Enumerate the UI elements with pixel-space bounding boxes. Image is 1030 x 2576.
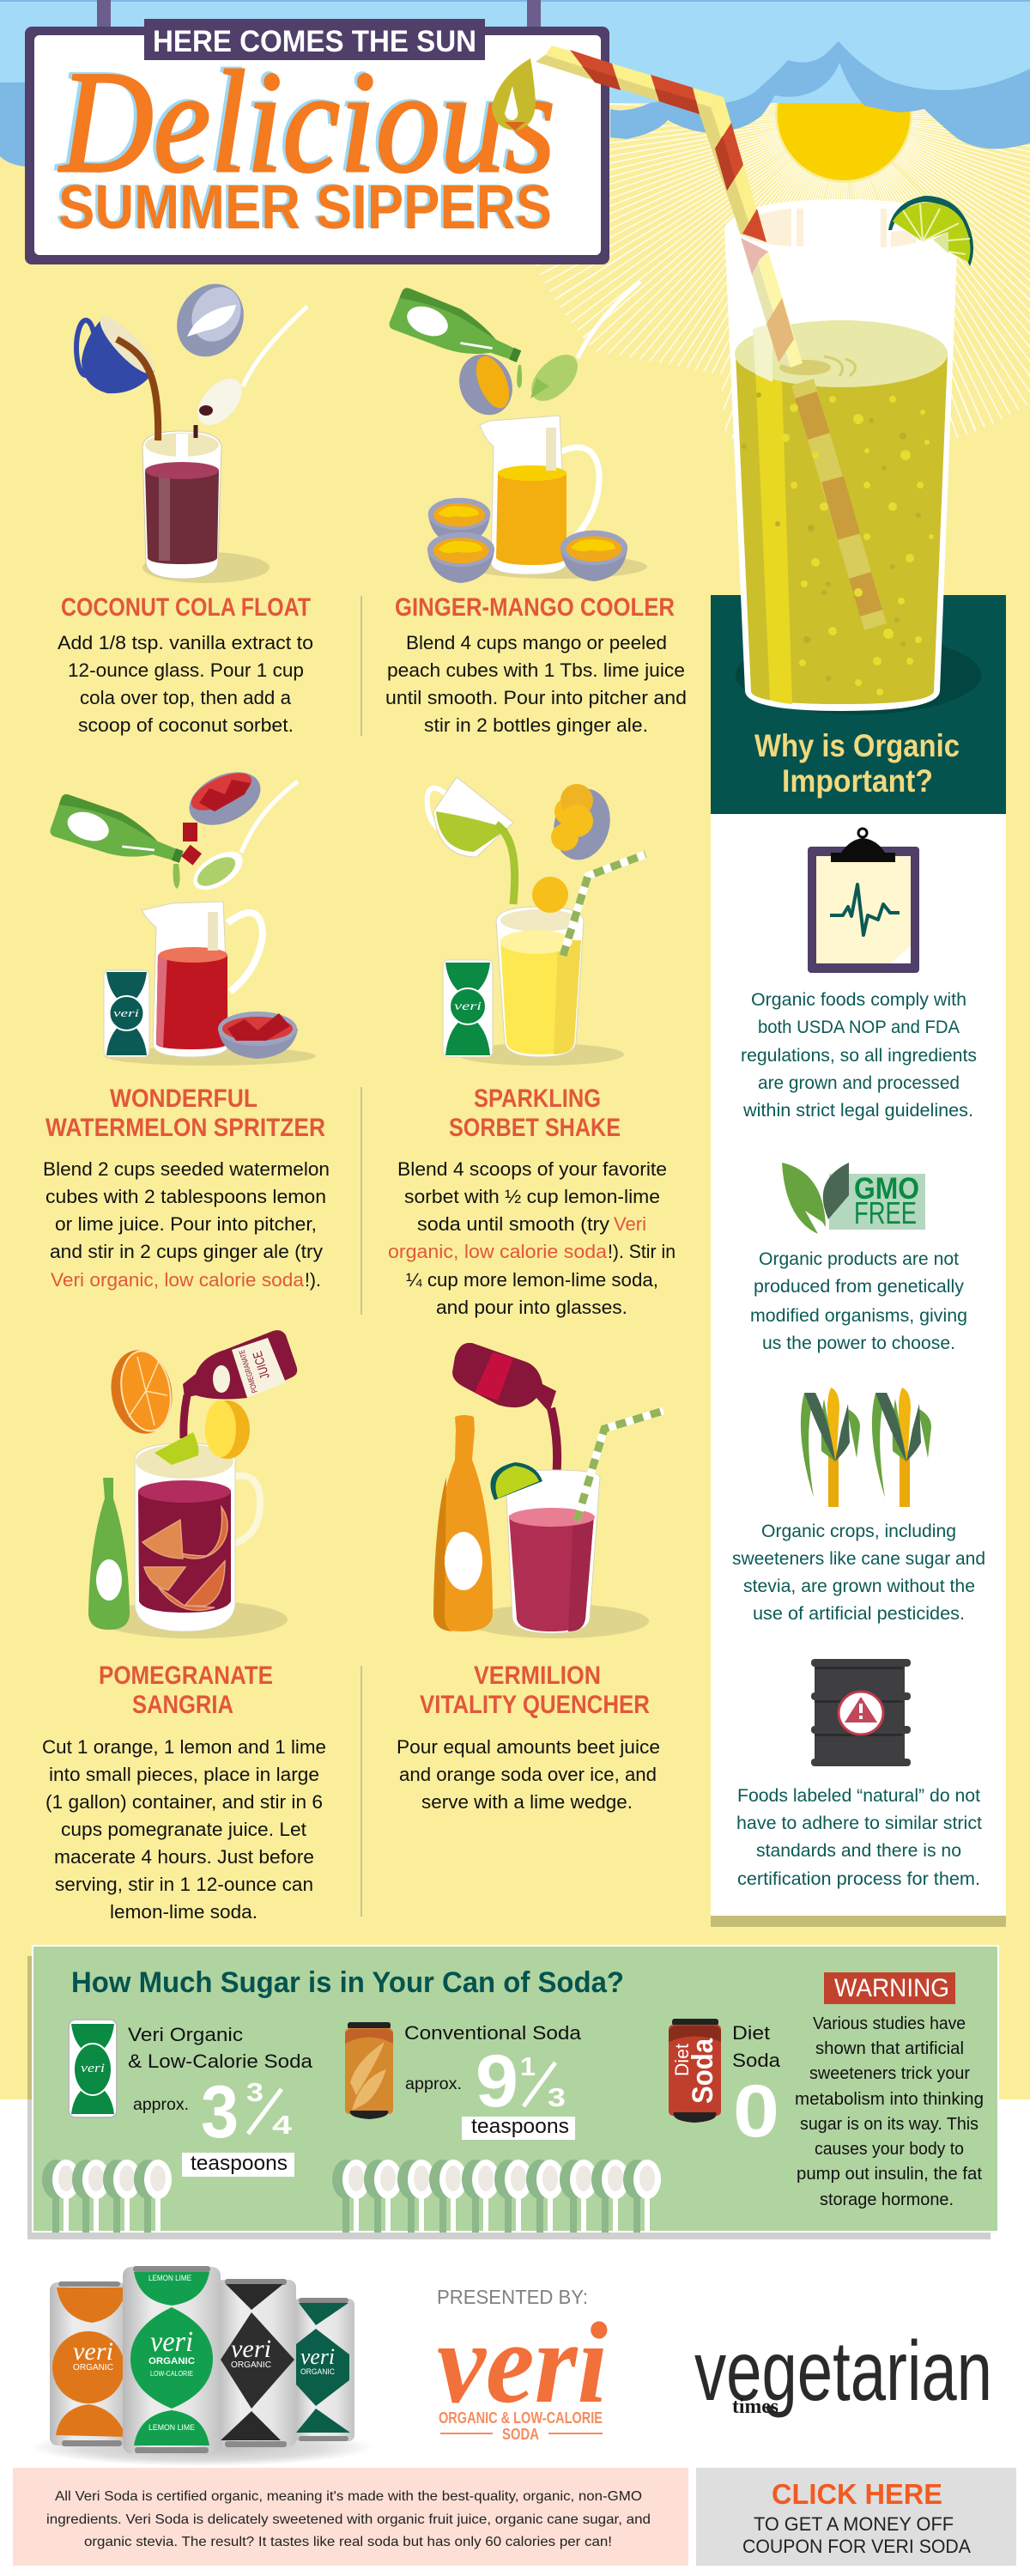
text: ginger-mango recipe: peach cubes with 1 Tbs. lime juice [387,659,685,681]
can: green: ORGANIC [148,2356,195,2366]
icon: barrel [811,1659,911,1766]
text: ginger-mango recipe: until smooth. Pour into pitcher and [385,687,687,708]
warning: Various studies have [813,2014,966,2033]
heading: watermelon spritzer: WATERMELON SPRITZER [45,1114,325,1142]
value: 9 1/3: 1 [520,2051,536,2081]
heading: why is organic important: Why is Organic [754,728,960,763]
value: 3 3/4: 3 [246,2077,264,2107]
text: natural [736,1786,982,1889]
illustration: watermelon spritzer [49,762,316,1066]
value: 0: 0 [733,2070,779,2153]
can: orange: veri [73,2337,113,2366]
heading: watermelon spritzer: WONDERFUL [110,1084,258,1113]
text: sorbet recipe: ¼ cup more lemon-lime soda, [406,1269,658,1291]
text: watermelon recipe: or lime juice. Pour into pitcher, [55,1213,317,1235]
can: green: LOW-CALORIE [150,2370,193,2378]
icon: gmo free [782,1163,925,1234]
text: sorbet recipe: organic, low calorie soda [388,1241,608,1262]
panel: veri soda description: ingredients. Veri Soda is delicately sweetened with organic fruit juice, organic cane sugar, and [46,2512,651,2527]
illustration: ginger-mango cooler [388,282,647,583]
heading: pomegranate sangria: SANGRIA [132,1691,233,1719]
can: teal: ORGANIC [300,2367,335,2376]
logo: veri: SODA [502,2426,539,2443]
submerged straw [803,382,876,627]
heading: vermilion vitality quencher: VITALITY QUENCHER [420,1691,650,1719]
fruit and juice bottle [105,1330,297,1465]
text: organic foods: regulations, so all ingredients [741,1046,977,1066]
text: coconut cola float recipe: scoop of coconut sorbet. [78,714,294,736]
warning: causes your body to [815,2140,964,2159]
clouds [0,0,1030,167]
text: gmo: us the power to choose. [762,1334,955,1353]
spoons: 10 teaspoons [332,2160,661,2233]
label: veri organic: & Low-Calorie Soda [128,2050,313,2072]
bowl [218,1012,298,1059]
value: 3 3/4: teaspoons [191,2152,288,2175]
fruit and juice bottle: JUICE [251,1349,273,1381]
illustration: sorbet shake [427,777,645,1066]
value: 3 3/4: 3 [201,2071,239,2154]
text: sorbet recipe: soda until smooth (try [417,1213,609,1235]
title: delicious: Delicious [58,41,555,203]
can: black [216,2279,296,2447]
warning: pump out insulin, the fat [797,2165,982,2184]
text: sorbet recipe: Blend 4 scoops of your favorite [397,1158,667,1180]
heading: ginger-mango cooler: GINGER-MANGO COOLER [395,593,675,622]
text: sorbet recipe: !). Stir in [608,1241,676,1262]
can: black: ORGANIC [231,2360,271,2370]
product photo: veri cans [30,2266,373,2466]
banner: here comes the sun: HERE COMES THE SUN [153,25,476,58]
text: sangria recipe: (1 gallon) container, and stir in 6 [45,1791,323,1813]
text: coconut cola float recipe: cola over top, then add a [80,687,292,708]
can: green: LEMON LIME [148,2274,191,2282]
panel: click here coupon: CLICK HERE [772,2478,942,2510]
value: 3 3/4: approx. [133,2096,189,2114]
value: 9 1/3: approx. [405,2075,462,2093]
can: green: veri [150,2326,193,2358]
text: sangria recipe: Cut 1 orange, 1 lemon and 1 lime [42,1736,326,1758]
label: veri organic: Veri Organic [128,2024,243,2045]
panel: veri soda description [13,2468,688,2566]
text: sangria recipe: cups pomegranate juice. Let [61,1819,306,1840]
label: diet soda [732,2022,781,2071]
panel: veri soda description: All Veri Soda is certified organic, meaning it's made with the best-quality, organic, non-GMO [55,2489,642,2504]
text: natural: have to adhere to similar strict [736,1814,982,1833]
warning: sugar is on its way. This [800,2115,978,2134]
text: watermelon recipe [43,1158,330,1291]
can [443,960,493,1057]
can: veri [113,1006,140,1019]
spoons: 4 teaspoons [42,2160,172,2233]
illustration: coconut cola float [76,271,307,583]
logo: veri: veri [437,2300,608,2427]
heading: pomegranate sangria [99,1662,273,1719]
text: watermelon recipe: and stir in 2 cups ginger ale (try [50,1241,323,1262]
main glass with drink [724,199,958,711]
text: gmo: Organic products are not [759,1249,959,1269]
ripple [779,356,855,376]
text: vermilion recipe: and orange soda over ice, and [399,1764,657,1785]
text: ginger-mango recipe: stir in 2 bottles ginger ale. [424,714,648,736]
can: diet soda: Soda [687,2038,719,2104]
text: crops: use of artificial pesticides. [753,1604,965,1624]
heading: why is organic important [754,728,960,799]
label: conventional soda: Conventional Soda [404,2022,582,2044]
text: organic foods: within strict legal guidelines. [742,1101,973,1121]
text: sorbet recipe [388,1158,676,1318]
text: watermelon recipe: !). [305,1269,321,1291]
fruit and juice bottle: POMEGRANATE [238,1349,259,1394]
text: sorbet recipe: Veri [614,1213,646,1235]
text: sangria recipe [42,1736,326,1923]
text: sangria recipe: lemon-lime soda. [110,1901,258,1923]
presented by: PRESENTED BY: [437,2286,588,2308]
heading: sorbet shake [449,1084,621,1142]
heading: vermilion vitality quencher: VERMILION [474,1662,601,1690]
value: 9 1/3: teaspoons [471,2115,569,2138]
heading: watermelon spritzer [45,1084,325,1142]
text: crops: sweeteners like cane sugar and [732,1549,985,1569]
label: diet soda: Soda [732,2050,781,2071]
text: coconut cola float recipe: Add 1/8 tsp. vanilla extract to [58,632,313,653]
logo: vegetarian times: times [732,2396,779,2418]
text: organic foods: Organic foods comply with [751,990,966,1010]
label: diet soda: Diet [732,2022,770,2044]
panel: click here coupon: TO GET A MONEY OFF [754,2513,954,2535]
can: veri organic [69,2020,117,2117]
bottle [88,1478,130,1630]
text: coconut cola float recipe: 12-ounce glass. Pour 1 cup [68,659,304,681]
can: diet soda [669,2019,721,2123]
text: sangria recipe: macerate 4 hours. Just before [54,1846,314,1868]
text: sorbet recipe: sorbet with ½ cup lemon-lime [404,1186,660,1207]
can: conventional soda [345,2022,393,2119]
warning [795,1972,984,2209]
can: orange: ORGANIC [73,2363,113,2372]
illustration: vermilion vitality quencher [433,1343,663,1638]
text: sorbet recipe: and pour into glasses. [436,1297,627,1318]
heading: coconut cola float: COCONUT COLA FLOAT [61,593,311,622]
text: sangria recipe: into small pieces, place in large [49,1764,319,1785]
warning: metabolism into thinking [795,2090,984,2109]
text: gmo: modified organisms, giving [750,1306,967,1326]
sun [778,48,910,180]
icon: gmo free: FREE [854,1195,917,1230]
value: 9 1/3: 9 [476,2040,518,2123]
text: crops: stevia, are grown without the [743,1577,975,1596]
text: sangria recipe: serving, stir in 1 12-ounce can [55,1874,313,1895]
heading: how much sugar: How Much Sugar is in Your Can of Soda? [71,1966,624,1999]
text: organic foods [741,990,977,1121]
value: 9 1/3: 3 [548,2082,566,2112]
label: veri organic [128,2024,313,2072]
can: teal [294,2298,354,2441]
can: teal: veri [300,2344,335,2369]
icon: clipboard [808,829,919,973]
can: orange [50,2281,127,2446]
can: veri organic: veri [81,2062,105,2075]
text: vermilion recipe: Pour equal amounts beet juice [397,1736,660,1758]
value: 9 1/3 [405,2040,575,2140]
can: green [123,2266,221,2453]
can: green: LEMON LIME [148,2423,195,2432]
heading: sorbet shake: SPARKLING [474,1084,601,1113]
lime wedge on main glass [888,196,973,266]
orange slices in drink [142,1507,227,1610]
icon: gmo free: GMO [854,1172,919,1206]
title: summer sippers: SUMMER SIPPERS [58,173,552,242]
value: 3 3/4: 4 [272,2110,293,2140]
text: natural: standards and there is no [756,1841,961,1861]
can: diet soda: Diet [671,2044,693,2076]
text: natural: certification process for them. [737,1869,980,1889]
background: white lower page [0,2099,1030,2576]
warning: shown that artificial [815,2039,964,2058]
sun rays [638,0,1030,320]
panel: veri soda description: organic stevia. The result? It tastes like real soda but has only 60 calories per can! [84,2535,612,2549]
text: gmo [750,1249,967,1353]
panel: click here coupon [696,2468,1016,2566]
heading: pomegranate sangria: POMEGRANATE [99,1662,273,1690]
can: veri [454,1000,482,1013]
text: gmo: produced from genetically [754,1277,965,1297]
text: crops [732,1522,985,1624]
value: 3 3/4 [133,2071,294,2177]
sky [0,0,1030,103]
warning: storage hormone. [820,2190,954,2209]
text: natural: Foods labeled “natural” do not [737,1786,980,1806]
title: delicious: Delicious [55,39,553,201]
can: black: veri [231,2335,271,2363]
text: ginger-mango recipe: Blend 4 cups mango or peeled [406,632,667,653]
text: watermelon recipe: Veri organic, low calorie soda [51,1269,305,1291]
panel: why is organic important [711,595,1006,1927]
text: watermelon recipe: Blend 2 cups seeded watermelon [43,1158,330,1180]
straw in main glass [536,46,803,368]
warning: sweeteners trick your [809,2064,970,2083]
title: summer sippers: SUMMER SIPPERS [56,173,549,241]
can [104,970,149,1057]
glass interior cream bands [736,209,916,247]
text: watermelon recipe: cubes with 2 tablespoons lemon [45,1186,326,1207]
icon: sugar cane [801,1388,931,1507]
text: crops: Organic crops, including [761,1522,956,1541]
tilted bottle [452,1343,556,1413]
warning: WARNING [834,1974,949,2002]
logo: veri: ORGANIC & LOW-CALORIE [439,2409,603,2427]
heading: sorbet shake: SORBET SHAKE [449,1114,621,1142]
drop from straw [492,58,536,131]
panel: sugar comparison [27,1946,998,2239]
text: vermilion recipe: serve with a lime wedge. [421,1791,633,1813]
heading: why is organic important: Important? [782,763,933,799]
sign [25,0,609,264]
text: organic foods: both USDA NOP and FDA [758,1018,960,1037]
heading: vermilion vitality quencher [420,1662,650,1719]
text: vermilion recipe [397,1736,660,1813]
illustration: pomegranate sangria [88,1330,297,1638]
text: coconut cola float recipe [58,632,313,736]
text: ginger-mango recipe [385,632,687,736]
text: organic foods: are grown and processed [758,1073,960,1093]
panel: click here coupon: COUPON FOR VERI SODA [742,2536,971,2557]
